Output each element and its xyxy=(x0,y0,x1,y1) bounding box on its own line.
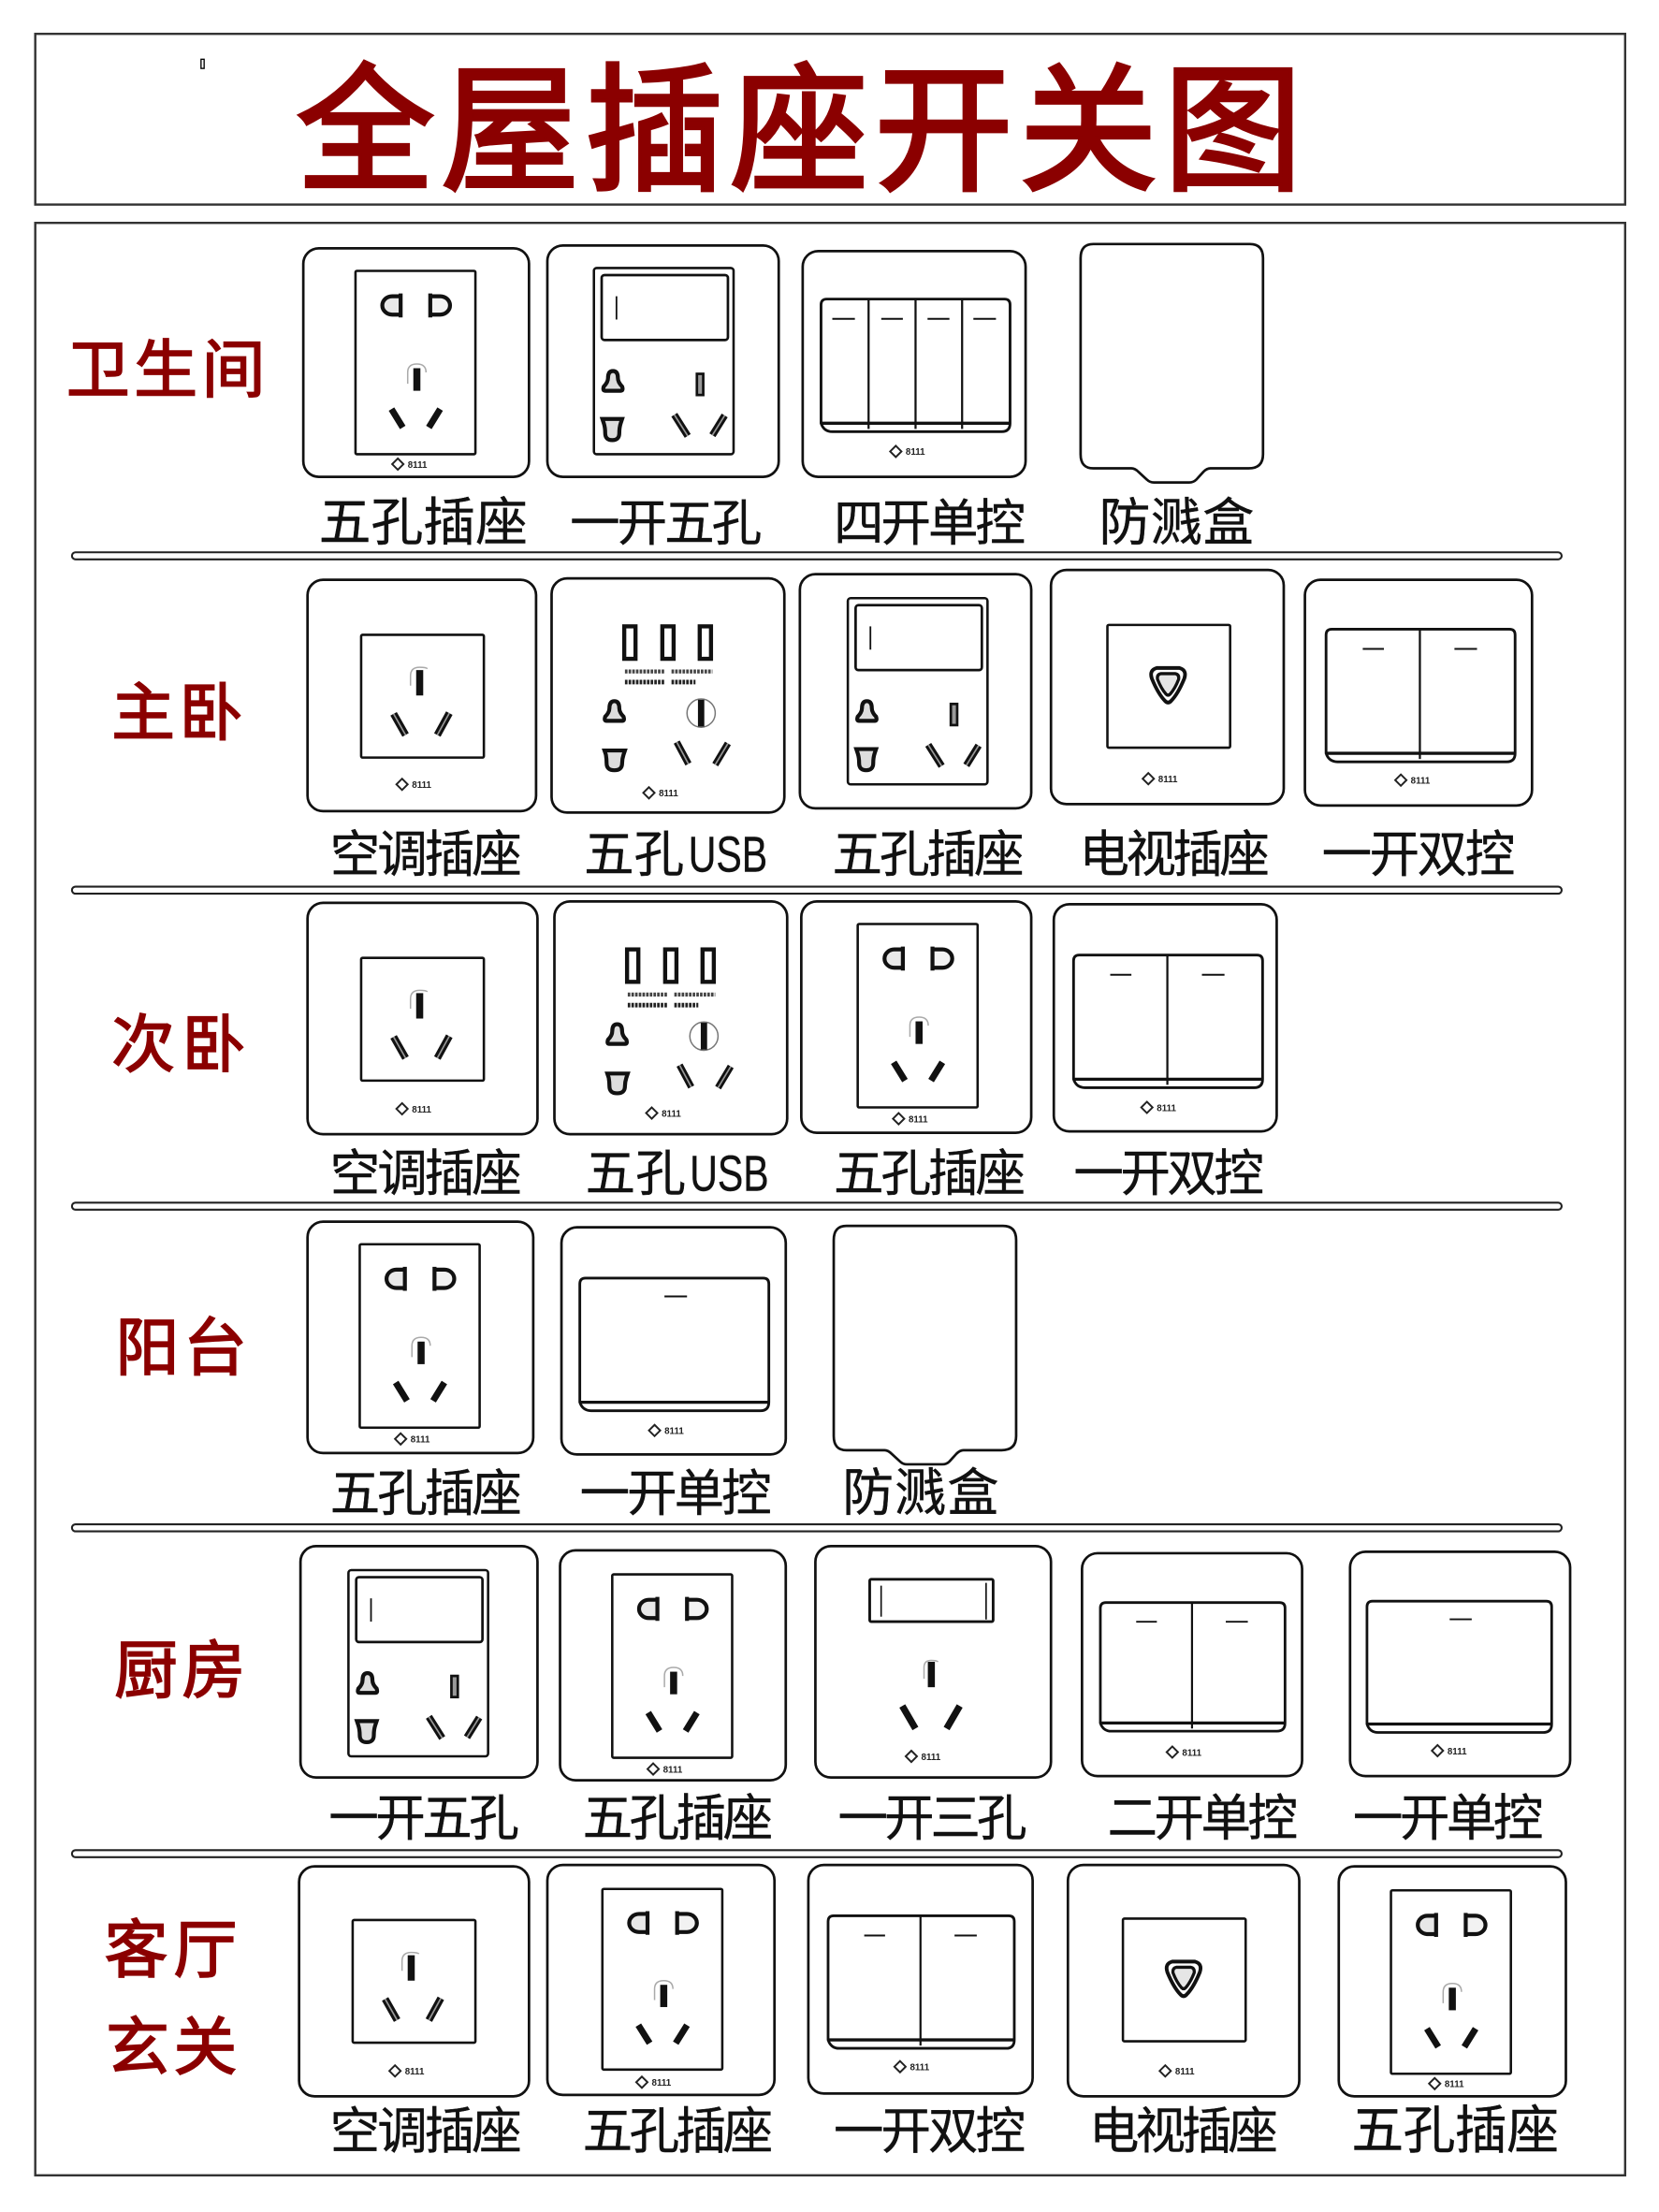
plate: 五孔USB xyxy=(551,578,784,812)
label: 电视插座 xyxy=(1089,2104,1278,2160)
plate: 一开单控: 8111 xyxy=(664,1427,684,1437)
plate: 四开单控 xyxy=(803,251,1026,477)
room heading: 阳台 xyxy=(116,1314,247,1384)
plate: 电视插座: 8111 xyxy=(1158,775,1178,785)
plate: 五孔插座 xyxy=(801,901,1031,1133)
section: 阳台 xyxy=(116,1222,1016,1522)
plate: 五孔插座 xyxy=(308,1222,533,1453)
label: 一开三孔 xyxy=(838,1791,1027,1846)
plate: 电视插座 xyxy=(1068,1865,1300,2096)
room heading: 次卧 xyxy=(111,1011,245,1081)
label: 五孔插座 xyxy=(834,1146,1026,1201)
plate: 空调插座 xyxy=(308,903,537,1134)
plate: 一开双控: 8111 xyxy=(1157,1103,1177,1113)
label: 空调插座 xyxy=(330,1146,522,1201)
plate: 五孔USB xyxy=(555,901,787,1134)
title panel xyxy=(36,34,1625,209)
label: 二开单控 xyxy=(1108,1791,1298,1846)
label: 空调插座 xyxy=(330,2104,522,2160)
plate: 一开五孔 xyxy=(547,245,779,477)
plate: 电视插座: 8111 xyxy=(1175,2067,1195,2077)
label: 一开双控 xyxy=(1073,1146,1264,1201)
label: 一开双控 xyxy=(1322,828,1515,883)
label: 一开双控 xyxy=(834,2104,1026,2160)
plate: 五孔插座 xyxy=(560,1550,786,1781)
room heading: 卫生间 xyxy=(66,336,265,406)
title: 全屋插座开关图 xyxy=(297,54,1302,209)
plate: 五孔插座 xyxy=(303,248,529,477)
label: 五孔 xyxy=(586,1146,686,1201)
label: 五孔插座 xyxy=(583,1791,773,1846)
label: 五孔 xyxy=(584,828,684,883)
plate: 五孔插座: 8111 xyxy=(1445,2080,1464,2090)
label: 防溅盒 xyxy=(842,1464,998,1522)
plate: 五孔插座: 8111 xyxy=(663,1765,683,1775)
label: 一开五孔 xyxy=(570,496,762,551)
label: 空调插座 xyxy=(330,828,522,883)
label xyxy=(584,828,767,883)
plate: 五孔插座: 8111 xyxy=(909,1114,928,1125)
plate: 防溅盒 xyxy=(834,1226,1016,1464)
plate: 一开双控: 8111 xyxy=(1411,777,1431,787)
room heading: 主卧 xyxy=(111,678,242,749)
plate: 一开双控 xyxy=(1305,580,1532,806)
label: USB xyxy=(689,828,767,883)
plate: 防溅盒 xyxy=(1081,244,1263,483)
room heading: 客厅 xyxy=(105,1916,237,1986)
plate: 一开双控 xyxy=(1054,904,1276,1131)
section: 客厅玄关 xyxy=(105,1865,1565,2160)
plate: 空调插座 xyxy=(299,1867,529,2096)
plate: 电视插座 xyxy=(1051,570,1284,804)
plate: 一开双控 xyxy=(808,1865,1033,2093)
plate: 一开五孔 xyxy=(300,1546,537,1778)
label: 四开单控 xyxy=(834,496,1026,551)
plate: 空调插座: 8111 xyxy=(412,780,431,791)
plate: 五孔插座: 8111 xyxy=(652,2078,672,2088)
plate: 五孔插座: 8111 xyxy=(408,460,428,471)
plate: 二开单控: 8111 xyxy=(1182,1748,1202,1758)
section: 厨房 xyxy=(114,1546,1570,1846)
plate: 五孔USB: 8111 xyxy=(659,789,678,799)
plate: 一开三孔: 8111 xyxy=(921,1753,941,1763)
plate: 五孔USB: 8111 xyxy=(662,1109,681,1119)
plate: 空调插座: 8111 xyxy=(412,1105,431,1115)
room heading: 厨房 xyxy=(114,1637,245,1707)
section: 主卧 xyxy=(111,570,1532,883)
label: 一开五孔 xyxy=(328,1791,519,1846)
plate: 一开单控 xyxy=(1350,1551,1570,1776)
room heading: 玄关 xyxy=(106,2014,237,2084)
label: 五孔插座 xyxy=(319,493,528,551)
plate: 空调插座: 8111 xyxy=(405,2067,425,2077)
label: 一开单控 xyxy=(580,1467,772,1522)
label: 五孔插座 xyxy=(330,1467,522,1522)
plate: 二开单控 xyxy=(1082,1553,1302,1776)
label: 一开单控 xyxy=(1353,1791,1543,1846)
plate: 一开单控: 8111 xyxy=(1448,1747,1467,1757)
label xyxy=(586,1146,769,1201)
plate: 五孔插座 xyxy=(1339,1867,1565,2096)
plate: 空调插座 xyxy=(308,580,536,811)
plate: 五孔插座 xyxy=(547,1865,775,2095)
plate: 五孔插座 xyxy=(800,575,1031,808)
section: 次卧 xyxy=(111,901,1276,1201)
label: 防溅盒 xyxy=(1099,493,1254,551)
label: 五孔插座 xyxy=(583,2104,773,2160)
label: 五孔插座 xyxy=(833,828,1025,883)
label: 电视插座 xyxy=(1079,828,1270,883)
plate: 一开三孔 xyxy=(815,1546,1051,1778)
plate: 五孔插座: 8111 xyxy=(411,1435,430,1446)
plate: 四开单控: 8111 xyxy=(906,447,925,458)
label: 五孔插座 xyxy=(1351,2102,1559,2160)
section: 卫生间 xyxy=(66,244,1263,551)
plate: 一开单控 xyxy=(561,1228,786,1454)
plate: 一开双控: 8111 xyxy=(910,2062,930,2073)
label: USB xyxy=(690,1146,769,1201)
